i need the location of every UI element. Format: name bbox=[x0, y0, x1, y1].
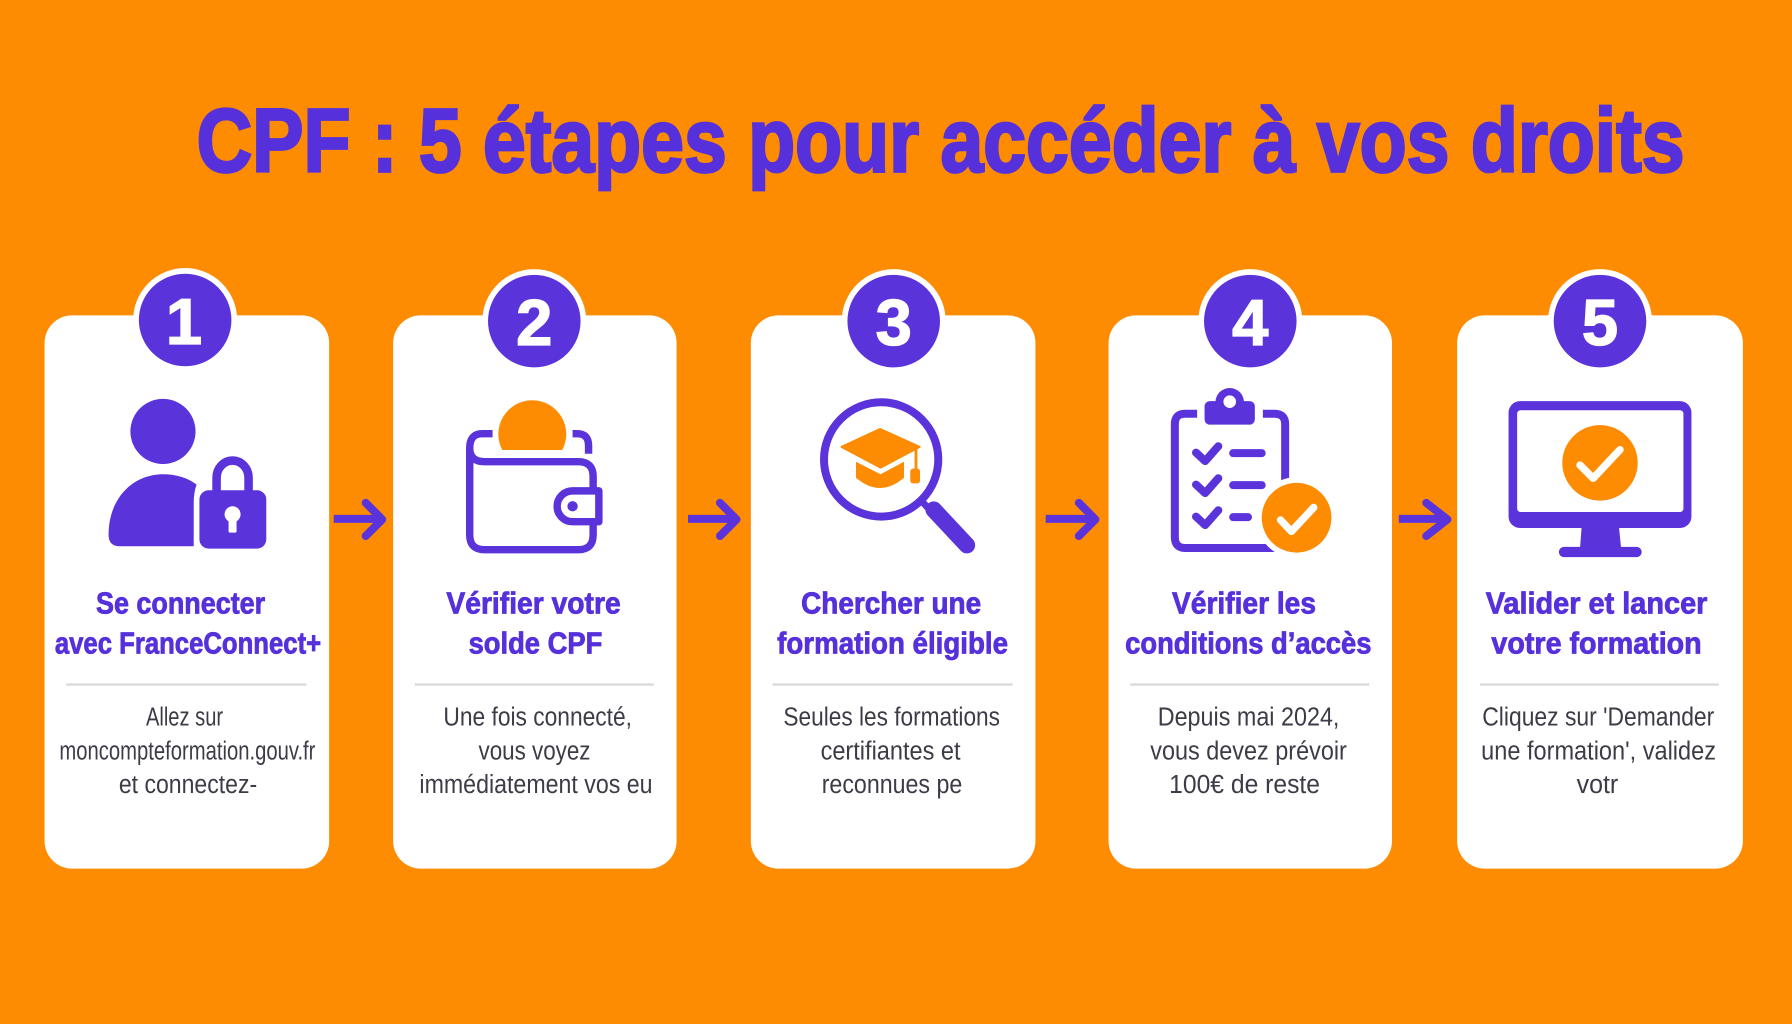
step 1 heading: avec FranceConnect+ bbox=[55, 626, 321, 661]
step 1 number badge bbox=[133, 268, 237, 372]
step 1 heading: Se connecter bbox=[96, 586, 265, 621]
step 4 description: 100€ de reste bbox=[1169, 771, 1320, 799]
step 2 description: immédiatement vos eu bbox=[419, 771, 653, 799]
step 4 heading: Vérifier les bbox=[1172, 586, 1316, 621]
step 1 number badge: 1 bbox=[166, 285, 202, 358]
step 5 number badge: 5 bbox=[1582, 286, 1618, 359]
arrow 1 to 2 bbox=[334, 503, 382, 536]
step 1 heading bbox=[55, 586, 321, 661]
step 2 description bbox=[419, 704, 653, 799]
step 4 description: Depuis mai 2024, bbox=[1158, 704, 1339, 732]
step 5 heading: Valider et lancer bbox=[1486, 586, 1707, 621]
step 2 description: Une fois connecté, bbox=[443, 704, 632, 732]
panel: step 1 bbox=[45, 268, 329, 869]
step 3 description: Seules les formations bbox=[783, 704, 1000, 732]
step 2 heading: solde CPF bbox=[469, 626, 602, 661]
step 3 number badge bbox=[842, 269, 946, 373]
arrow 2 to 3 bbox=[688, 503, 737, 536]
panel: step 4 bbox=[1109, 269, 1392, 869]
step 1 description: moncompteformation.gouv.fr bbox=[59, 737, 316, 765]
step 5 heading bbox=[1486, 586, 1707, 661]
step 4 description: vous devez prévoir bbox=[1150, 737, 1347, 765]
step 3 description bbox=[783, 704, 1000, 799]
step 3 heading bbox=[777, 586, 1008, 661]
arrow 4 to 5 bbox=[1399, 503, 1447, 536]
arrow 3 to 4 bbox=[1046, 503, 1095, 536]
step 3 description: reconnues pe bbox=[822, 771, 962, 799]
step 4 number badge: 4 bbox=[1232, 286, 1268, 359]
step 5 description: votr bbox=[1577, 771, 1619, 799]
step 2 heading bbox=[446, 586, 621, 661]
step 5 description: une formation', validez bbox=[1481, 737, 1716, 765]
panel: step 3 bbox=[751, 269, 1035, 869]
panel: step 5 bbox=[1457, 269, 1743, 869]
step 1 description: Allez sur bbox=[146, 704, 223, 732]
step 1 description bbox=[59, 704, 316, 799]
icon: monitor with validation check bbox=[1509, 401, 1691, 557]
step 5 heading: votre formation bbox=[1491, 626, 1702, 661]
icon: wallet with coin bbox=[470, 400, 599, 550]
step 4 heading bbox=[1125, 586, 1371, 661]
step 4 description bbox=[1150, 704, 1347, 799]
step 4 heading: conditions d’accès bbox=[1125, 626, 1371, 661]
step 2 description: vous voyez bbox=[479, 737, 591, 765]
icon: user with padlock bbox=[109, 399, 266, 549]
step 3 description: certifiantes et bbox=[821, 737, 961, 765]
step 3 heading: formation éligible bbox=[777, 626, 1008, 661]
step 3 heading: Chercher une bbox=[801, 586, 981, 621]
step 5 description: Cliquez sur 'Demander bbox=[1482, 704, 1715, 732]
step 3 number badge: 3 bbox=[876, 286, 912, 359]
step 2 number badge bbox=[482, 269, 586, 373]
icon: clipboard checklist with validation badge bbox=[1175, 388, 1337, 558]
icon: magnifier with graduation cap bbox=[824, 402, 967, 545]
step 4 number badge bbox=[1198, 269, 1302, 373]
step 5 number badge bbox=[1548, 269, 1652, 373]
step 5 description bbox=[1481, 704, 1716, 799]
panel: step 2 bbox=[393, 269, 677, 869]
step 2 number badge: 2 bbox=[516, 286, 552, 359]
step 2 heading: Vérifier votre bbox=[446, 586, 621, 621]
step 1 description: et connectez- bbox=[119, 771, 257, 799]
